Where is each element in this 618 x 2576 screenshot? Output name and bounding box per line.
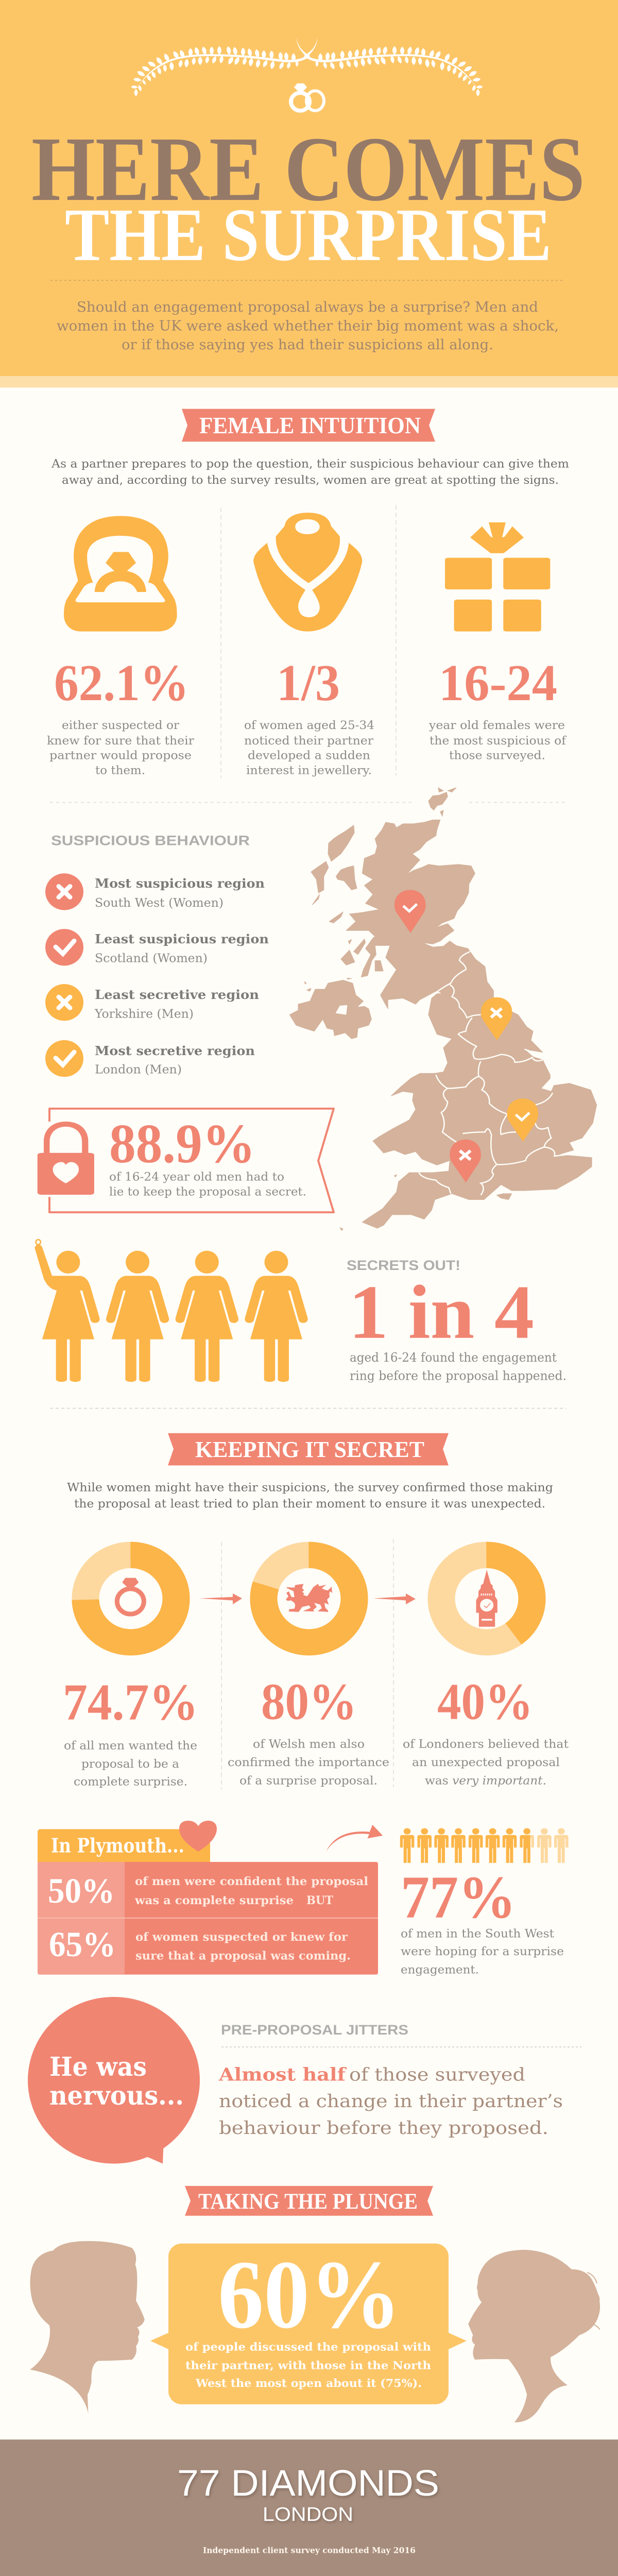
stat: 74.7%: proposal to be a (81, 1757, 179, 1771)
finding text: behaviour before they proposed. (219, 2117, 548, 2139)
stat: 62.1%: 62.1% (54, 655, 189, 712)
legend: least suspicious: Least suspicious region (95, 931, 269, 946)
stat: 1/3 (244, 655, 374, 777)
speech bubble (28, 1997, 200, 2164)
stat: 16-24: 16-24 (439, 655, 557, 712)
panel: In Plymouth: In Plymouth... (51, 1834, 184, 1857)
section intro: As a partner prepares to pop the question, their suspicious behaviour can give them (51, 457, 569, 470)
map pin: South West (450, 1140, 481, 1182)
callout: 60%: their partner, with those in the North (185, 2360, 431, 2372)
stat: 62.1%: either suspected or (62, 719, 179, 732)
stat: 1/3: of women aged 25-34 (244, 719, 374, 732)
stat: 74.7% (63, 1674, 198, 1789)
callout: 88.9%: of 16-24 year old men had to (109, 1171, 284, 1183)
intro text (57, 299, 559, 353)
heading banner (168, 1433, 449, 1465)
legend: least secretive: Yorkshire (Men) (94, 1007, 194, 1021)
table: 65% (49, 1925, 116, 1964)
legend: least suspicious (45, 929, 269, 965)
stat: 62.1% (47, 655, 194, 777)
subheading: PRE-PROPOSAL JITTERS (221, 2022, 408, 2038)
table: was a complete surprise (134, 1894, 294, 1907)
stat description (350, 1350, 566, 1383)
icon: gift (445, 522, 550, 632)
stat: 77%: of men in the South West (401, 1927, 554, 1940)
legend: least suspicious: Scotland (Women) (95, 951, 208, 965)
stat: 1/3: interest in jewellery. (246, 764, 372, 777)
icon: ring (117, 1578, 144, 1614)
callout: 88.9%: 88.9% (109, 1113, 255, 1174)
stat: 40% (403, 1673, 569, 1788)
stat: 40%: 40% (437, 1673, 533, 1731)
panel: suspicious behaviour map (38, 788, 597, 1231)
speech bubble: He was (49, 2052, 147, 2082)
icon: wedding rings (291, 83, 324, 111)
logo (177, 2463, 439, 2526)
icon: padlock (38, 1122, 94, 1195)
legend: least secretive: Least secretive region (95, 987, 259, 1002)
callout: 88.9%: lie to keep the proposal a secret. (109, 1185, 306, 1198)
stat: 80%: confirmed the importance (228, 1756, 389, 1769)
section intro: the proposal at least tried to plan their moment to ensure it was unexpected. (74, 1498, 545, 1511)
stat: 1/3: 1/3 (277, 655, 340, 712)
finding text (218, 2064, 563, 2139)
source note: Independent client survey conducted May 2016 (203, 2546, 416, 2555)
legend: most suspicious: South West (Women) (95, 895, 224, 910)
stat: 16-24 (428, 655, 567, 762)
stat: 16-24: those surveyed. (449, 749, 545, 762)
pictogram: 77 percent of men (400, 1828, 569, 1863)
table: BUT (306, 1894, 333, 1907)
donut chart: 74.7% (85, 1555, 176, 1642)
subheading: SUSPICIOUS BEHAVIOUR (51, 833, 250, 848)
section intro: While women might have their suspicions, the survey confirmed those making (67, 1481, 553, 1494)
section intro (67, 1481, 553, 1511)
stat: 74.7%: complete surprise. (74, 1775, 187, 1789)
callout: 60%: 60% (218, 2241, 401, 2349)
panel: taking the plunge (30, 2186, 600, 2422)
arrow: curved (326, 1825, 383, 1852)
stat: 1 in 4: 1 in 4 (349, 1269, 534, 1354)
panel: pre-proposal jitters (28, 1997, 581, 2164)
stat: 40%: an unexpected proposal (412, 1756, 560, 1769)
callout: 88.9% (38, 1109, 334, 1212)
table: of men were confident the proposal (135, 1875, 368, 1888)
stat: 74.7%: 74.7% (63, 1674, 198, 1731)
panel: secrets out (35, 1240, 566, 1383)
legend: most suspicious (45, 873, 265, 910)
stat: 62.1%: knew for sure that their (47, 734, 194, 748)
stat: 62.1%: partner would propose (49, 749, 192, 762)
stat: 62.1%: to them. (95, 764, 145, 777)
map of the UK (289, 788, 597, 1231)
stat: 80%: 80% (261, 1673, 357, 1731)
stat: 80%: of Welsh men also (253, 1738, 365, 1751)
panel: keeping it secret (0, 1433, 618, 2576)
callout: 60%: of people discussed the proposal with (185, 2341, 431, 2354)
icon: heart (179, 1821, 217, 1852)
stat: 74.7%: of all men wanted the (64, 1739, 197, 1752)
intro text: or if those saying yes had their suspicions all along. (122, 337, 493, 353)
title (31, 117, 585, 277)
woman 2 (106, 1251, 169, 1382)
speech bubble: nervous... (49, 2081, 184, 2111)
stat: 16-24: year old females were (428, 719, 565, 732)
legend: most suspicious: Most suspicious region (95, 876, 265, 891)
table (38, 1862, 378, 1975)
arrow (200, 1594, 242, 1604)
finding text: of those surveyed (349, 2064, 525, 2086)
icon: four women (35, 1240, 308, 1382)
stat: 16-24: the most suspicious of (430, 734, 567, 748)
stat description: ring before the proposal happened. (350, 1368, 566, 1383)
stat: 77%: were hoping for a surprise (401, 1945, 564, 1958)
panel: header (0, 0, 618, 387)
heading banner: FEMALE INTUITION (199, 413, 421, 438)
silhouette: man (30, 2241, 145, 2414)
icon: laurel wreath (131, 38, 483, 96)
section intro (51, 457, 569, 487)
woman 3 (176, 1251, 238, 1382)
logo: LONDON (263, 2504, 353, 2526)
donut chart: 40% (38, 1555, 569, 1977)
finding text: noticed a change in their partner’s (219, 2091, 563, 2112)
legend: most secretive (45, 1040, 255, 1077)
icon: ring box (64, 516, 177, 632)
subheading: SECRETS OUT! (347, 1257, 460, 1273)
section intro: away and, according to the survey results, women are great at spotting the signs. (62, 474, 559, 487)
logo: 77 DIAMONDS (177, 2463, 439, 2504)
stat: 77%: 77% (401, 1863, 516, 1930)
panel: footer (0, 2439, 618, 2576)
table: 50% (48, 1871, 115, 1911)
stat: 40%: was very important. (425, 1774, 546, 1788)
callout: 60% (150, 2241, 467, 2404)
table: sure that a proposal was coming. (135, 1950, 351, 1963)
map pin: Scotland (394, 890, 426, 933)
heading banner: TAKING THE PLUNGE (198, 2189, 418, 2214)
table: of women suspected or knew for (135, 1930, 348, 1944)
map pin: Yorkshire (481, 997, 512, 1040)
stat: 1/3: noticed their partner (244, 734, 373, 748)
stat: 1/3: developed a sudden (248, 749, 370, 762)
callout: 60%: West the most open about it (75%). (195, 2377, 422, 2390)
stat: 80% (228, 1673, 389, 1788)
donut chart: 80% (264, 1555, 354, 1642)
woman 4 (245, 1251, 308, 1382)
intro text: Should an engagement proposal always be a surprise? Men and (77, 299, 538, 315)
finding text: Almost half (218, 2064, 347, 2086)
legend: least secretive (45, 984, 259, 1021)
stat description: aged 16-24 found the engagement (350, 1350, 557, 1365)
panel: In Plymouth (38, 1821, 378, 1975)
panel: female intuition (47, 409, 569, 778)
arrow (373, 1594, 416, 1604)
stat: 80%: of a surprise proposal. (239, 1774, 377, 1788)
heading banner: KEEPING IT SECRET (195, 1437, 424, 1462)
icon: Welsh dragon (286, 1584, 332, 1612)
legend: most secretive: London (Men) (95, 1062, 182, 1076)
stat: 77% (401, 1863, 564, 1977)
woman raising ring (35, 1240, 100, 1382)
legend: most secretive: Most secretive region (95, 1043, 255, 1058)
silhouette: woman (468, 2250, 600, 2422)
map pin: London (507, 1098, 538, 1142)
stat: 77%: engagement. (401, 1963, 479, 1977)
intro text: women in the UK were asked whether their big moment was a shock, (57, 318, 559, 334)
stat: 40%: of Londoners believed that (403, 1738, 569, 1751)
icon: necklace (253, 513, 362, 632)
icon: Big Ben (476, 1570, 497, 1626)
